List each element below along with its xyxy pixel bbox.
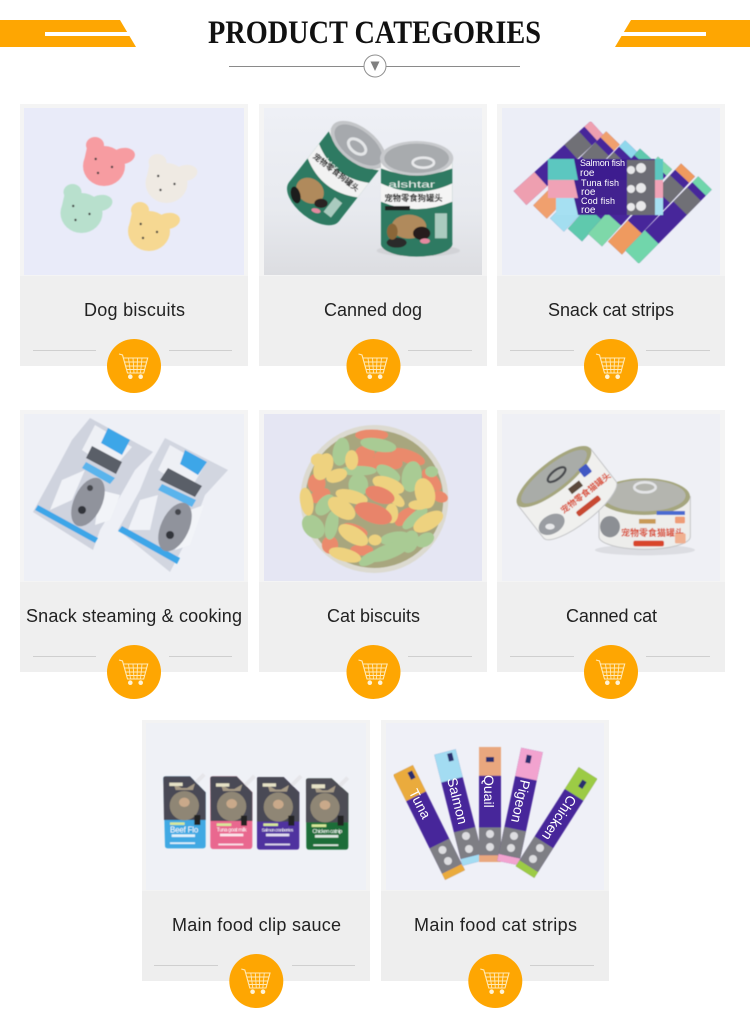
- panel: Canned cat: [497, 410, 725, 699]
- product photo: spout pouches: Chicken catnip: [312, 829, 342, 835]
- product photo: bowl of cat biscuits: [264, 414, 482, 581]
- label: Dog biscuits: [84, 300, 185, 320]
- heading: PRODUCT CATEGORIES: [208, 15, 541, 51]
- product photo: steamed snack bags: [24, 414, 244, 581]
- panel: Main food clip sauce: [142, 720, 370, 1008]
- panel: Dog biscuits: [20, 104, 248, 393]
- product photo: snack cat strips: roe: [581, 187, 596, 198]
- label: Canned dog: [324, 300, 422, 320]
- icon: shopping cart: [346, 339, 400, 393]
- product photo: snack cat strips: roe: [581, 205, 596, 216]
- product photo: canned dog food: 宠物零食狗罐头: [384, 193, 443, 203]
- label: Cat biscuits: [327, 606, 420, 626]
- product photo: spout pouches: Tuna goat milk: [217, 828, 247, 834]
- divider line: [408, 656, 472, 658]
- product photo: canned dog food: alshtar: [388, 179, 435, 189]
- left can: [278, 111, 394, 235]
- product photo: canned cat food: 宠物零食猫罐头: [621, 527, 684, 538]
- panel: Cat biscuits: [259, 410, 487, 699]
- title decoration: right orange band: [615, 20, 750, 47]
- label: Snack cat strips: [548, 300, 674, 320]
- icon: shopping cart: [468, 954, 522, 1008]
- product photo: main food cat strips: Salmon: [444, 776, 471, 826]
- panel: Main food cat strips: [381, 720, 609, 1008]
- divider lines: [33, 350, 232, 352]
- divider lines: [510, 656, 710, 658]
- product photo: canned dog food: Ishtar: [317, 152, 340, 173]
- product photo: spout pouches: Beef Flo: [170, 825, 199, 834]
- icon: shopping cart: [584, 645, 638, 699]
- product photo: spout pouches: Salmon cranberries: [262, 828, 294, 833]
- panel: Snack cat strips: [497, 104, 725, 393]
- left can: 宠物零食猫罐头: [558, 469, 613, 516]
- icon: shopping cart: [229, 954, 283, 1008]
- divider lines: [33, 656, 232, 658]
- divider line: [530, 964, 594, 966]
- label: Snack steaming & cooking: [26, 606, 242, 626]
- product photo: dog biscuits: [24, 108, 244, 275]
- icon: shopping cart: [107, 339, 161, 393]
- product photo: snack cat strips: Salmon fish: [580, 158, 625, 168]
- panel: Snack steaming & cooking: [20, 410, 248, 699]
- product photo: main food cat strips: Chicken: [539, 792, 580, 844]
- panel: Canned dog: [259, 104, 487, 393]
- product photo: spout pouches: [146, 723, 366, 890]
- heading divider with arrow badge: [229, 55, 520, 77]
- right can: [599, 497, 690, 549]
- icon: shopping cart: [346, 645, 400, 699]
- icon: shopping cart: [107, 645, 161, 699]
- product photo: main food cat strips: Quail: [481, 775, 497, 808]
- divider line: [408, 350, 472, 352]
- product photo: main food cat strips: [386, 723, 604, 890]
- icon: shopping cart: [584, 339, 638, 393]
- product photo: snack cat strips: Cod fish: [581, 196, 615, 206]
- label: Canned cat: [566, 606, 657, 626]
- product photo: canned cat food: [502, 414, 720, 581]
- right can: [381, 159, 452, 244]
- horizontal strips: [548, 159, 663, 215]
- title decoration: left orange band: [0, 20, 136, 47]
- left can: [509, 437, 624, 548]
- product photo: main food cat strips: Tuna: [406, 786, 434, 822]
- label: Main food cat strips: [414, 915, 577, 935]
- product photo: snack cat strips: roe: [580, 168, 595, 179]
- label: Main food clip sauce: [172, 915, 341, 935]
- product photo: snack cat strips: [502, 108, 720, 275]
- divider lines: [154, 964, 355, 966]
- product photo: canned dog food: 宠物零食狗罐头: [311, 151, 361, 193]
- product photo: snack cat strips: Tuna fish: [581, 178, 619, 188]
- divider lines: [510, 350, 710, 352]
- product photo: main food cat strips: Pigeon: [508, 778, 533, 824]
- product photo: canned dog food: [264, 108, 482, 275]
